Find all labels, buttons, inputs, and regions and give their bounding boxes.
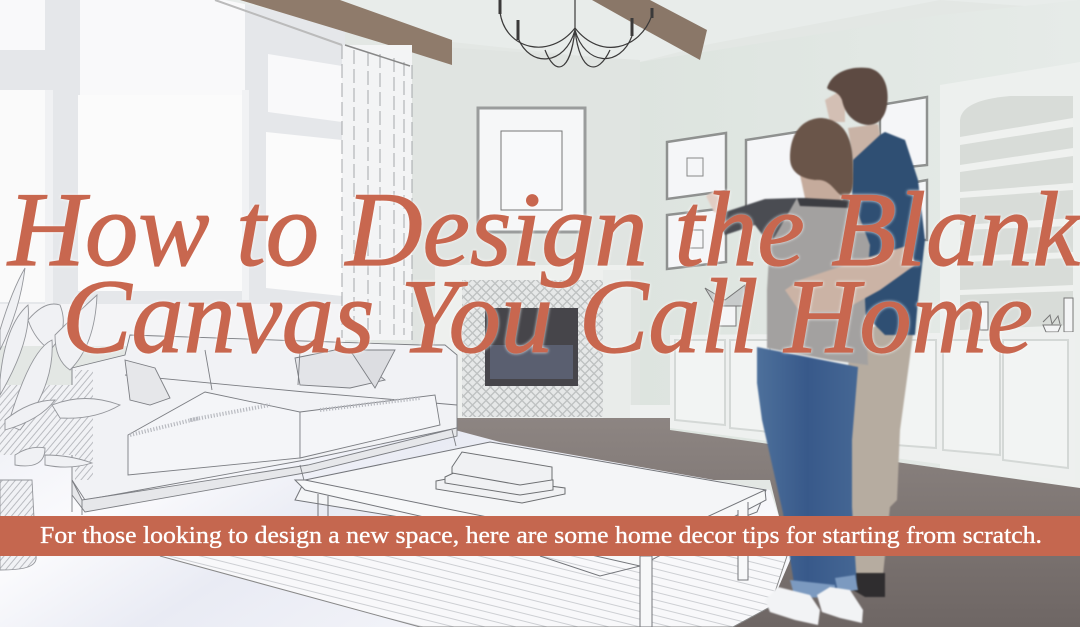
ceiling beams (240, 0, 707, 65)
framed picture above fireplace (478, 108, 585, 232)
built-in shelves (940, 62, 1080, 490)
subtitle band (0, 516, 1080, 556)
sketched plant (0, 268, 120, 570)
man (825, 68, 925, 597)
title line 1: How to Design the Blank (6, 171, 1080, 288)
curtain (215, 0, 412, 340)
title (6, 171, 1080, 375)
fireplace (435, 265, 631, 418)
sketched books (436, 452, 565, 503)
wall frames (667, 97, 927, 269)
sketched rug (160, 530, 787, 627)
back wall (412, 45, 640, 420)
sketched coffee table (295, 442, 766, 627)
decor sketches on shelves (705, 285, 1073, 332)
sketched sofa (72, 335, 457, 515)
cabinets (630, 332, 1075, 482)
sketched floor (0, 430, 792, 627)
woman (706, 118, 915, 625)
left window wall (0, 0, 345, 346)
title line 2: Canvas You Call Home (62, 258, 1033, 375)
subtitle text: For those looking to design a new space, here are some home decor tips for starting from scratch. (40, 522, 1042, 549)
right wall (640, 0, 1080, 490)
chandelier (500, 0, 652, 67)
ceiling (225, 0, 1080, 62)
photo floor (455, 418, 1080, 627)
